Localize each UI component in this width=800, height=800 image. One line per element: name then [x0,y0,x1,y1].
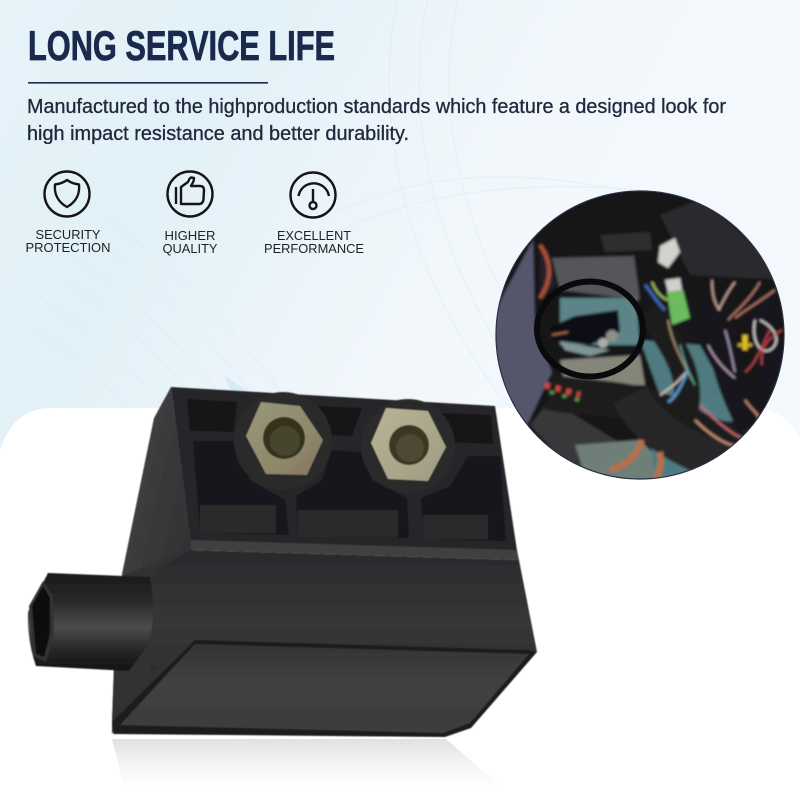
left hex nut [246,402,323,475]
product reflection [112,739,505,790]
coloured wires [545,280,782,446]
body text: high impact resistance and better durability. [27,123,409,145]
feature: security protection [26,172,110,255]
ledge [191,540,519,560]
feature: excellent performance [264,172,364,256]
lower side face [112,545,195,734]
label: excellent performance: PERFORMANCE [264,241,364,256]
product: sensor module [28,387,537,737]
label: security protection: SECURITY [36,227,101,242]
feature: higher quality [162,172,218,256]
location ring [537,282,643,376]
nut collars [234,392,332,490]
connector [28,573,153,671]
harness [548,392,775,439]
label: security protection: PROTECTION [26,240,110,255]
green board and white plug [667,290,690,325]
connector opening [29,581,54,662]
label: higher quality: HIGHER [164,228,216,243]
installation photo circle [495,190,785,480]
label: excellent performance: EXCELLENT [277,228,351,243]
top face [171,387,518,557]
label: higher quality: QUALITY [162,241,218,256]
title underline [28,82,268,84]
sensor in photo [550,310,620,345]
icon: thumbs up [168,172,212,216]
body text [27,96,726,145]
lid [112,640,537,737]
lower cells [193,441,506,541]
upper cells [187,399,493,444]
white lower panel [0,408,800,800]
body text: Manufactured to the highproduction standards which feature a designed look for [27,96,726,118]
icon: shield [44,172,90,216]
front face [150,550,537,675]
title: LONG SERVICE LIFE [28,22,335,69]
left side face [112,387,193,735]
icon: gauge [290,172,336,218]
right hex nut [371,408,446,481]
